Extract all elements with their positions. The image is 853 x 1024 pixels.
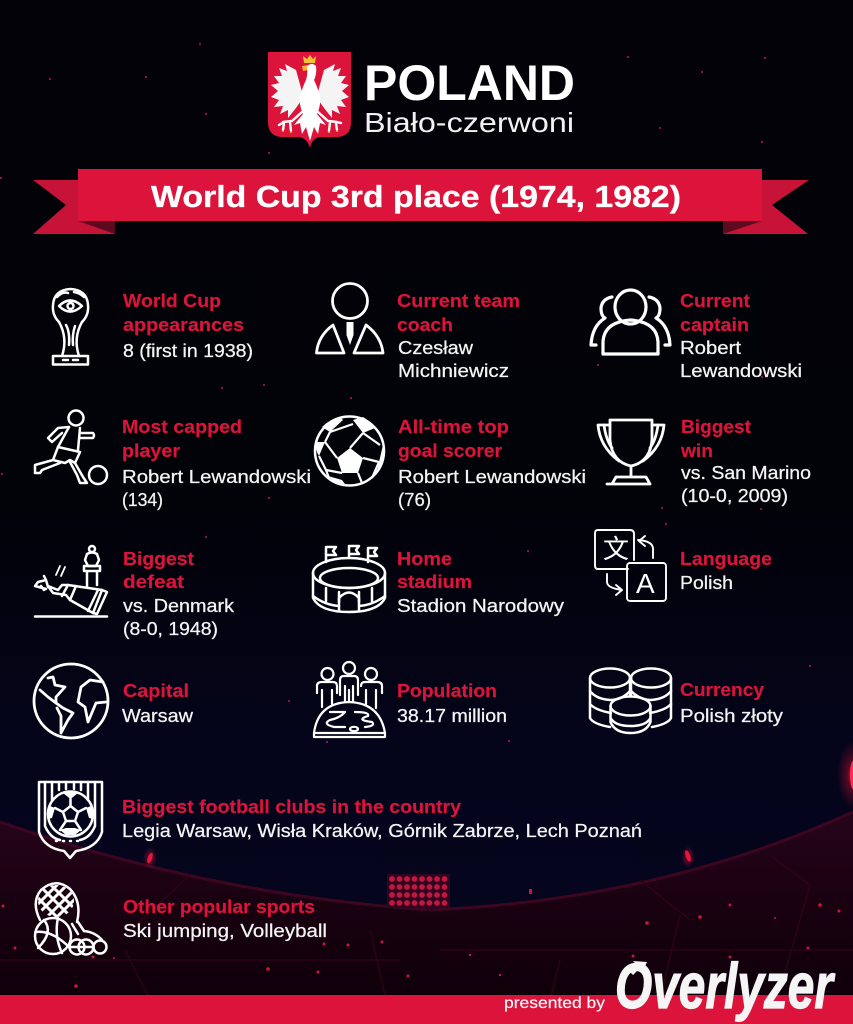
text: world cup appearances: appearances xyxy=(123,315,244,335)
text: all-time top goal scorer: Robert Lewandowski xyxy=(398,467,586,487)
icon: population xyxy=(314,662,385,737)
text: current team coach: Michniewicz xyxy=(398,361,509,381)
text: current team coach xyxy=(397,291,520,381)
text: current team coach: Czesław xyxy=(398,338,474,358)
text: capital: Warsaw xyxy=(122,706,194,726)
text: home stadium: Stadion Narodowy xyxy=(397,596,564,616)
text: biggest defeat: vs. Denmark xyxy=(123,596,235,616)
text: language: Language xyxy=(680,549,772,569)
text: biggest defeat xyxy=(123,549,235,639)
text: world cup appearances: World Cup xyxy=(123,291,221,311)
text: language xyxy=(680,549,772,593)
text: biggest football clubs: Legia Warsaw, Wisła Kraków, Górnik Zabrze, Lech Poznań xyxy=(122,821,642,841)
text: other popular sports: Other popular sports xyxy=(123,897,315,917)
text: world cup appearances xyxy=(123,291,253,361)
text: current team coach: coach xyxy=(397,315,453,335)
text: biggest defeat: defeat xyxy=(123,572,184,592)
text: capital xyxy=(122,681,194,726)
text: home stadium xyxy=(397,549,564,616)
text: all-time top goal scorer: All-time top xyxy=(398,417,509,437)
icon: captain xyxy=(591,290,670,354)
text: world cup appearances: 8 (first in 1938) xyxy=(123,341,253,361)
icon: trophy xyxy=(598,420,664,484)
text: population: 38.17 million xyxy=(397,706,507,726)
icon: other sports xyxy=(30,876,106,954)
text: current team coach: Current team xyxy=(397,291,520,311)
text: home stadium: Home xyxy=(397,549,452,569)
text: biggest football clubs: Biggest football clubs in the country xyxy=(122,797,461,817)
text: most capped player: player xyxy=(122,441,180,461)
text: biggest football clubs xyxy=(122,797,642,841)
text: home stadium: stadium xyxy=(397,572,472,592)
text: all-time top goal scorer: (76) xyxy=(398,490,431,510)
text: current captain: Current xyxy=(680,291,750,311)
text: currency: Polish złoty xyxy=(680,706,783,726)
icon: globe xyxy=(34,664,108,738)
text: other popular sports xyxy=(123,897,327,941)
icon: stadium xyxy=(313,546,385,612)
text: current captain: Lewandowski xyxy=(680,361,802,381)
text: biggest win xyxy=(680,417,811,506)
text: biggest win: win xyxy=(680,441,713,461)
footer band xyxy=(0,995,853,1024)
text: capital: Capital xyxy=(123,681,189,701)
text: population: Population xyxy=(397,681,497,701)
icon: football player xyxy=(35,410,107,484)
text: biggest defeat: (8-0, 1948) xyxy=(123,619,218,639)
text: current captain: Robert xyxy=(680,338,741,358)
title: POLAND: POLAND xyxy=(364,55,575,111)
text: population xyxy=(397,681,507,726)
subtitle: nickname: Biało-czerwoni xyxy=(364,107,574,138)
text: most capped player: Robert Lewandowski xyxy=(122,467,311,487)
icon: football xyxy=(315,416,384,486)
text: current captain xyxy=(680,291,802,381)
icon: world cup trophy xyxy=(53,289,88,364)
footer: presented by: presented by xyxy=(504,995,605,1012)
icon: fallen chess king xyxy=(35,546,107,616)
icon: translation: A xyxy=(636,568,655,599)
banner ribbon xyxy=(33,169,809,234)
icon: club crest xyxy=(39,782,102,858)
icon: translation xyxy=(595,530,666,601)
icon: coins xyxy=(590,668,671,733)
text: biggest win: Biggest xyxy=(681,417,751,437)
banner headline: World Cup 3rd place (1974, 1982) xyxy=(151,179,681,214)
icon: coach xyxy=(316,284,383,353)
text: all-time top goal scorer: goal scorer xyxy=(398,441,502,461)
text: language: Polish xyxy=(680,573,733,593)
text: biggest win: (10-0, 2009) xyxy=(681,486,788,506)
icon: Polish coat of arms xyxy=(268,52,351,148)
text: currency: Currency xyxy=(680,680,764,700)
text: most capped player: (134) xyxy=(122,490,163,510)
icon: translation: 文 xyxy=(603,534,629,564)
text: currency xyxy=(680,680,783,726)
text: all-time top goal scorer xyxy=(398,417,586,510)
text: most capped player xyxy=(122,417,311,510)
text: current captain: captain xyxy=(680,315,749,335)
text: other popular sports: Ski jumping, Volleyball xyxy=(123,921,327,941)
text: most capped player: Most capped xyxy=(122,417,242,437)
text: biggest win: vs. San Marino xyxy=(681,463,811,483)
stadium floodlight xyxy=(387,874,450,908)
text: biggest defeat: Biggest xyxy=(123,549,194,569)
